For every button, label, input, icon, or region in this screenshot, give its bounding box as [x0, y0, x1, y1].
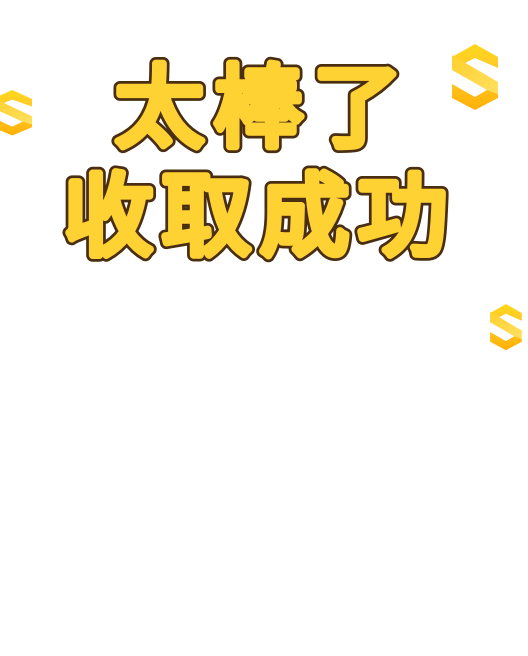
title: line one: 太棒了 — [114, 59, 412, 159]
icon: S logo left edge — [0, 90, 32, 136]
title: line two: 收取成功 — [64, 168, 456, 268]
title: line two: 收取成功 — [64, 168, 456, 268]
icon: large S logo top right — [452, 44, 498, 110]
icon: S logo right middle — [490, 304, 522, 350]
title: line one: 太棒了 — [114, 59, 412, 159]
